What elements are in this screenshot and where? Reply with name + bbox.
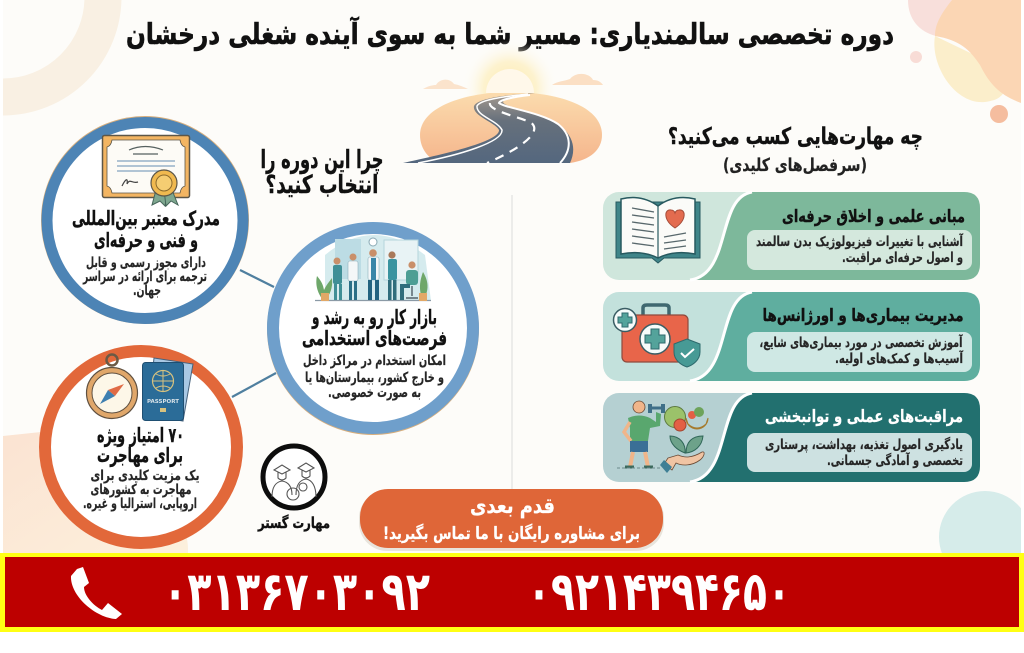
- heading: what skills: [668, 124, 923, 176]
- panel: scientific foundations: [603, 192, 980, 280]
- panel: international certificate: [41, 116, 249, 324]
- panel: diseases and emergencies: [603, 292, 980, 381]
- panel: immigration points: برای مهاجرت: [97, 443, 183, 467]
- icon: passport: [142, 358, 193, 421]
- logo: maharat gostar: [257, 446, 330, 532]
- call to action: قدم بعدی: [470, 494, 555, 518]
- call to action: برای مشاوره رایگان با ما تماس بگیرید!: [383, 523, 640, 544]
- icon: passport: PASSPORT: [147, 399, 180, 405]
- panel: growing job market: و خارج کشور، بیمارستان‌ها یا: [305, 370, 444, 386]
- contact banner: [0, 553, 1024, 632]
- icon: certificate: [102, 136, 190, 206]
- panel: diseases and emergencies: مدیریت بیماری‌ها و اورژانس‌ها: [762, 306, 964, 326]
- panel: international certificate: دارای مجوز رسمی و قابل: [86, 255, 206, 271]
- call to action: [359, 489, 664, 551]
- icon: open book: [616, 198, 700, 263]
- heading: why this course: انتخاب کنید؟: [266, 170, 378, 199]
- panel: practical care and rehabilitation: یادگیری اصول تغذیه، بهداشت، پرستاری: [765, 436, 963, 453]
- icon: first aid kit: [614, 305, 700, 367]
- icon: compass: [86, 354, 138, 418]
- panel: international certificate: مدرک معتبر بین‌المللی: [72, 206, 220, 230]
- panel: growing job market: به صورت خصوصی.: [328, 385, 421, 401]
- panel: immigration points: اروپایی، استرالیا و غیره.: [83, 496, 197, 512]
- icon: fitness and nutrition: [617, 401, 708, 473]
- phone number: landline: ۰۳۱۳۶۷۰۳۰۹۲: [163, 560, 430, 623]
- connector lines: [232, 270, 276, 397]
- panel: immigration points: یک مزیت کلیدی برای: [90, 468, 200, 484]
- panel: international certificate: ترجمه برای ارائه در سراسر: [82, 269, 207, 285]
- panel: immigration points: مهاجرت به کشورهای: [90, 482, 192, 498]
- panel: growing job market: امکان استخدام در مراکز داخل: [303, 353, 446, 369]
- panel: international certificate: و فنی و حرفه‌ای: [94, 228, 198, 252]
- heading: what skills: چه مهارت‌هایی کسب می‌کنید؟: [668, 124, 923, 150]
- panel: immigration points: ۷۰ امتیاز ویژه: [97, 423, 184, 447]
- panel: scientific foundations: و اصول حرفه‌ای مراقبت.: [842, 250, 963, 266]
- heading: why this course: چرا این دوره را: [260, 145, 384, 175]
- icon: phone handset: [71, 567, 122, 619]
- panel: scientific foundations: مبانی علمی و اخلاق حرفه‌ای: [782, 207, 965, 227]
- panel: growing job market: بازار کار رو به رشد و: [311, 305, 437, 329]
- panel: growing job market: فرصت‌های استخدامی: [302, 326, 447, 350]
- heading: why this course: [260, 145, 384, 199]
- panel: practical care and rehabilitation: تخصصی و آمادگی جسمانی.: [827, 452, 963, 469]
- heading: what skills: (سرفصل‌های کلیدی): [723, 155, 867, 176]
- logo: maharat gostar: مهارت گستر: [257, 514, 330, 532]
- icon: healthcare team: [315, 235, 431, 301]
- panel: diseases and emergencies: آسیب‌ها و کمک‌های اولیه.: [835, 350, 963, 367]
- panel: practical care and rehabilitation: مراقبت‌های عملی و توانبخشی: [765, 407, 963, 427]
- panel: international certificate: جهان.: [133, 283, 161, 299]
- panel: growing job market: [267, 223, 479, 435]
- illustration: winding road and sunrise: [403, 40, 603, 163]
- panel: practical care and rehabilitation: [603, 393, 980, 482]
- phone number: mobile: ۰۹۲۱۴۳۹۴۶۵۰: [527, 560, 791, 623]
- panel: immigration points: [45, 351, 237, 543]
